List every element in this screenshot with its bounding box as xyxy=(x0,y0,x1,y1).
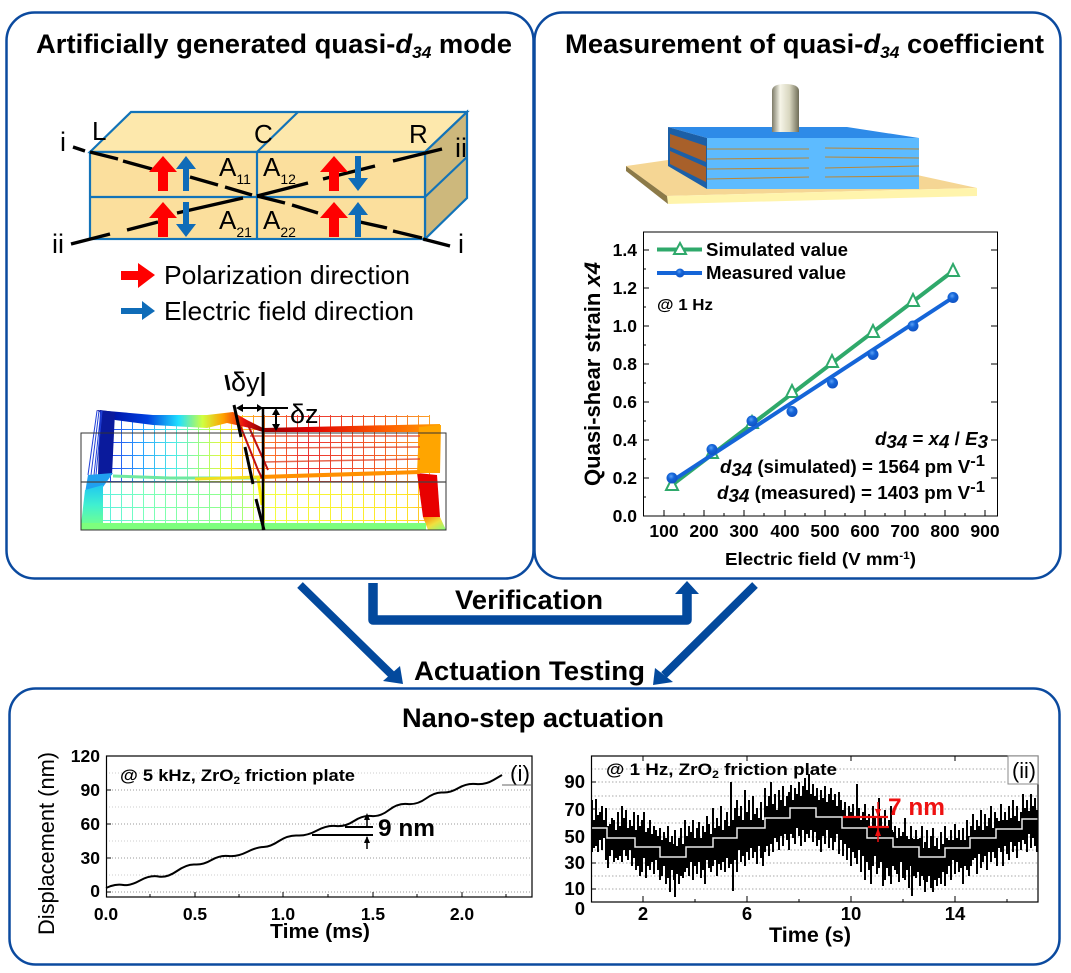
x axis labels xyxy=(94,904,474,924)
annotation: test condition: friction plate xyxy=(240,766,355,785)
labels on block: 11 xyxy=(236,171,251,187)
arrow: right panel to actuation testing xyxy=(653,585,755,685)
x axis labels: 100 xyxy=(649,521,679,541)
x axis labels: 10 xyxy=(841,903,861,924)
heading: right panel title: coefficient xyxy=(899,29,1044,59)
y axis labels: 0.6 xyxy=(613,392,637,412)
annotation: d34 equations: -1 xyxy=(970,453,985,470)
white step trace xyxy=(591,808,1038,857)
y axis labels: 90 xyxy=(564,771,585,792)
y axis labels: 1.2 xyxy=(613,278,637,298)
chart (ii): displacement at 1 Hz xyxy=(564,756,1038,947)
dashed line i-i xyxy=(73,147,450,246)
y axis labels xyxy=(564,771,585,919)
heading: right panel title: 34 xyxy=(880,43,900,62)
y axis labels: 0.8 xyxy=(613,354,637,374)
y axis labels xyxy=(613,240,637,526)
annotation: d34 equations: d xyxy=(875,429,887,449)
labels on block: 21 xyxy=(236,224,252,240)
annotation: d34 equations: = xyxy=(907,429,929,449)
y axis labels xyxy=(71,746,100,901)
y axis labels: 120 xyxy=(71,746,100,766)
annotation: d34 equations: (measured) = 1403 pm V xyxy=(749,483,970,503)
x axis labels: 0.5 xyxy=(183,904,207,924)
tick marks xyxy=(106,756,506,897)
annotation: test condition: @ 5 kHz, ZrO xyxy=(120,766,225,785)
annotation: d34 equations: (simulated) = 1564 pm V xyxy=(752,457,970,477)
x axis labels xyxy=(638,903,966,924)
annotation: d34 equations: E xyxy=(965,429,979,449)
annotation: d34 equations: d xyxy=(720,457,732,477)
annotation: 7 nm step xyxy=(843,794,945,842)
y axis labels: 0.0 xyxy=(613,506,637,526)
y axis labels: 0 xyxy=(90,881,100,901)
annotation: 7 nm step: 7 nm xyxy=(888,794,945,821)
axis ticks xyxy=(643,250,997,516)
panel tag (i): (i) xyxy=(510,761,530,786)
x axis labels xyxy=(649,521,1000,541)
x axis labels: 600 xyxy=(850,521,880,541)
x axis labels: 0.0 xyxy=(94,904,118,924)
annotation: d34 equations: 3 xyxy=(978,432,988,452)
legend: polarization and electric field: Electric field direction xyxy=(164,296,414,326)
panel: nano-step actuation xyxy=(10,688,1060,964)
legend: Measured value xyxy=(706,263,846,283)
labels on block: ii xyxy=(455,133,467,163)
labels on block: C xyxy=(254,119,273,149)
noise trace xyxy=(591,774,1038,897)
annotation: d34 equations: / xyxy=(949,429,965,449)
labels on block: ii xyxy=(52,229,64,259)
labels on block xyxy=(52,116,467,259)
x axis labels: 400 xyxy=(770,521,800,541)
annotation: d34 equations: -1 xyxy=(970,479,985,496)
y axis labels: 60 xyxy=(81,814,100,834)
tick marks xyxy=(591,756,1007,902)
annotation: 9 nm step xyxy=(312,813,435,849)
y axis labels: 0.2 xyxy=(613,468,637,488)
panel tag (i) xyxy=(502,761,531,786)
annotation: d34 equations: x xyxy=(928,429,940,449)
annotation: test condition: @ 1 Hz, ZrO xyxy=(606,760,702,779)
dashed line ii-ii xyxy=(71,149,442,244)
x axis labels: 2.0 xyxy=(450,904,474,924)
x axis title: -1 xyxy=(899,550,910,562)
x axis labels: 6 xyxy=(742,903,752,924)
deflection lines and delta-y / delta-z annotation: δz xyxy=(290,399,319,429)
series: simulated value xyxy=(666,264,959,490)
labels on block: 12 xyxy=(280,171,296,187)
legend xyxy=(657,240,848,283)
arrow: verification xyxy=(373,581,699,620)
annotation: d34 equations: 34 xyxy=(731,460,752,480)
labels on block: A xyxy=(219,205,236,235)
annotation: d34 equations: d xyxy=(717,483,730,503)
labels on block: A xyxy=(219,152,236,182)
panel tag (ii): (ii) xyxy=(1012,758,1036,783)
y axis title: Displacement (nm) xyxy=(34,752,59,935)
x axis title: ) xyxy=(910,549,916,569)
x axis labels: 1.0 xyxy=(271,904,295,924)
x axis title: Electric field (V mm xyxy=(725,549,887,569)
panel: artificially generated quasi-d34 mode xyxy=(6,12,534,578)
deflection lines and delta-y / delta-z annotation: δy xyxy=(231,367,260,397)
x axis labels: 1.5 xyxy=(361,904,385,924)
annotation: d34 equations: 34 xyxy=(886,432,907,452)
y axis title: Quasi-shear strain x4 xyxy=(580,262,605,486)
annotation: test condition: 2 xyxy=(712,769,719,781)
y axis labels: 0 xyxy=(575,898,585,919)
heading: left panel title: 34 xyxy=(412,43,432,62)
labels on block: A xyxy=(263,152,280,182)
chart: quasi-shear strain vs electric field xyxy=(580,232,1000,569)
heading: right panel title: Measurement of quasi-d xyxy=(565,29,880,59)
y axis labels: 10 xyxy=(564,878,585,899)
y axis labels: 70 xyxy=(564,799,585,820)
y axis labels: 1.0 xyxy=(613,316,637,336)
x axis labels: 300 xyxy=(729,521,759,541)
series: measured value xyxy=(666,292,958,484)
heading: left panel title: Artificially generated quasi-d xyxy=(36,29,412,59)
annotation: test condition: friction plate xyxy=(719,760,837,779)
legend: Simulated value xyxy=(706,240,848,260)
y axis labels: 90 xyxy=(81,780,100,800)
x axis labels: 900 xyxy=(970,521,1000,541)
x axis labels: 2 xyxy=(638,903,648,924)
deflection lines and delta-y / delta-z annotation xyxy=(226,367,319,530)
annotation: d34 equations: 34 xyxy=(728,486,749,506)
annotation: d34 equations xyxy=(717,429,988,506)
labels on block: R xyxy=(409,119,428,149)
arrows: electric field (blue) xyxy=(176,156,368,237)
x axis labels: 700 xyxy=(890,521,920,541)
y axis labels: 30 xyxy=(81,848,100,868)
displacement curve xyxy=(106,775,502,888)
heading: bottom panel title: Nano-step actuation xyxy=(402,703,664,733)
x axis labels: 500 xyxy=(810,521,840,541)
illustration: actuator stack on friction plate xyxy=(626,84,977,204)
x axis title: Time (s) xyxy=(769,923,851,947)
annotation: d34 equations: 4 xyxy=(938,432,949,452)
y axis labels: 50 xyxy=(564,826,585,847)
x axis labels: 200 xyxy=(689,521,719,541)
y axis labels: 1.4 xyxy=(613,240,637,260)
labels on block: i xyxy=(60,127,66,157)
arrows: polarization (red) xyxy=(149,156,348,237)
heading: left panel title: mode xyxy=(431,29,512,59)
annotation: test condition: 2 xyxy=(233,775,240,787)
label: actuation testing: Actuation Testing xyxy=(414,656,645,686)
legend: polarization and electric field xyxy=(121,260,414,326)
x axis labels: 800 xyxy=(930,521,960,541)
x axis labels: 14 xyxy=(945,903,966,924)
simulation: deformed FEM mesh xyxy=(81,367,446,530)
labels on block: L xyxy=(92,116,106,146)
y axis labels: 30 xyxy=(564,852,585,873)
labels on block: 22 xyxy=(280,224,296,240)
x axis title: Time (ms) xyxy=(270,921,370,943)
annotation: frequency: @ 1 Hz xyxy=(657,297,713,314)
labels on block: i xyxy=(458,229,464,259)
annotation: 9 nm step: 9 nm xyxy=(378,815,435,842)
legend: polarization and electric field: Polarization direction xyxy=(164,260,410,290)
arrow: left panel to actuation testing xyxy=(300,585,403,684)
chart (i): displacement at 5 kHz xyxy=(34,746,532,943)
diagram: segmented piezoelectric block xyxy=(52,112,467,259)
panel: measurement of quasi-d34 coefficient xyxy=(534,12,1060,578)
label: verification: Verification xyxy=(455,585,603,615)
y axis labels: 0.4 xyxy=(613,430,637,450)
labels on block: A xyxy=(263,205,280,235)
